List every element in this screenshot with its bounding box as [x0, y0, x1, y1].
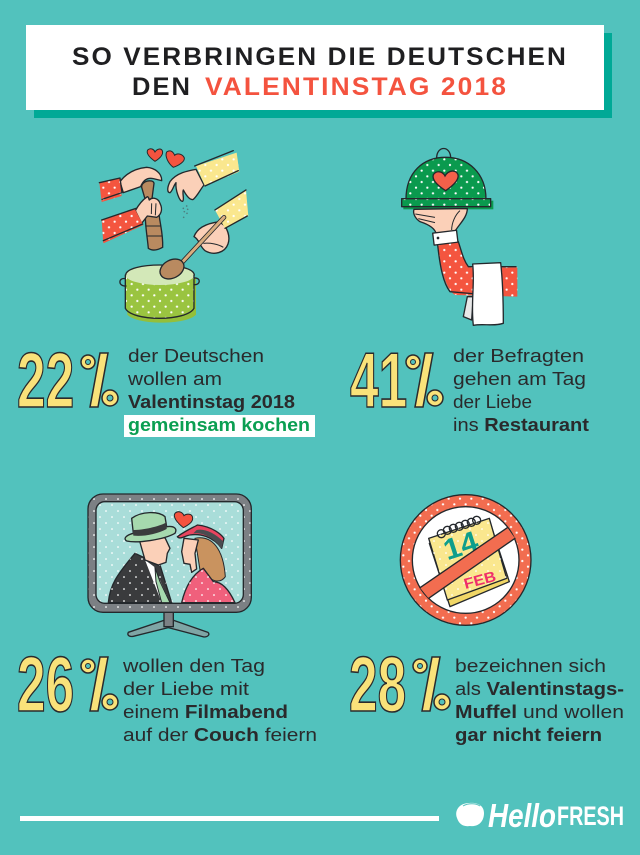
icon: hearts [147, 149, 184, 167]
stat text: einem Filmabend [123, 702, 288, 722]
stat text: bezeichnen sich [455, 656, 606, 676]
percentage: 22%: 22 [17, 337, 74, 425]
logo: HelloFRESH [456, 797, 624, 834]
stat text [122, 656, 317, 745]
icon: hand with yellow sleeve salting [168, 151, 239, 218]
icon: man with hat [108, 513, 176, 603]
stat text: wollen am [127, 369, 222, 389]
title text: VALENTINSTAG 2018 [205, 73, 508, 101]
icon: heart on TV [174, 512, 193, 528]
stat: 22 percent [17, 337, 315, 437]
percent sign [81, 353, 118, 407]
stat: 26 percent [17, 641, 317, 745]
icon: TV stand [128, 612, 209, 637]
title text: SO VERBRINGEN DIE DEUTSCHEN [72, 43, 568, 71]
icon: heart on cloche [433, 171, 458, 191]
stat: 41 percent [350, 337, 589, 435]
icon: prohibition bar [420, 528, 515, 598]
stat text: auf der Couch feiern [123, 725, 317, 745]
stat text: der Liebe mit [123, 679, 249, 699]
stat: 28 percent [349, 641, 624, 745]
stat text [453, 346, 589, 435]
illustration: waiter with cloche [402, 148, 517, 325]
icon: calendar [429, 516, 509, 607]
icon: woman with hat [177, 525, 235, 603]
stat text: gemeinsam kochen [128, 415, 310, 435]
percentage: 41% [350, 337, 443, 425]
percentage: 28%: 28 [349, 641, 406, 729]
percentage: 41%: 41 [350, 337, 407, 425]
footer line [20, 816, 439, 821]
icon: calendar: FEB [462, 569, 498, 593]
title text [72, 43, 568, 101]
stat text: Muffel und wollen [455, 702, 624, 722]
icon: wooden spoon [157, 217, 224, 283]
percentage: 28% [349, 641, 450, 729]
percent sign [81, 657, 118, 711]
stat text: gehen am Tag [453, 369, 586, 389]
stat text [124, 346, 315, 437]
icon: hand with red sleeve top [99, 167, 162, 202]
icon: red sleeve [433, 230, 517, 297]
title text: DEN [132, 73, 192, 101]
icon: cooking pot [120, 265, 199, 323]
stat text: der Befragten [453, 346, 584, 366]
stat text [455, 656, 624, 745]
stat text: der Liebe [453, 392, 532, 412]
icon: pepper mill [142, 181, 163, 250]
icon: hand with yellow sleeve stirring [194, 190, 248, 253]
percentage: 22% [17, 337, 118, 425]
icon: TV frame [88, 494, 251, 612]
icon: white towel [463, 263, 503, 325]
icon: prohibition ring background [400, 495, 531, 625]
icon: serving hand [414, 209, 467, 235]
icon: cloche [402, 148, 493, 209]
illustration: cooking together [99, 149, 248, 323]
stat text: ins Restaurant [453, 415, 589, 435]
percent sign [406, 353, 443, 407]
logo: HelloFRESH: Hello [488, 797, 556, 834]
title banner [26, 25, 612, 118]
percentage: 26%: 26 [17, 641, 74, 729]
stat text: gar nicht feiern [455, 725, 602, 745]
percent sign [413, 657, 450, 711]
percentage: 26% [17, 641, 118, 729]
stat text: der Deutschen [128, 346, 264, 366]
icon: hand with red sleeve bottom [102, 197, 162, 243]
stat text: als Valentinstags- [455, 679, 624, 699]
icon: lemon [456, 803, 484, 826]
stat text: Valentinstag 2018 [128, 392, 295, 412]
icon: calendar: 14 [439, 525, 483, 567]
illustration: crossed-out calendar [400, 495, 531, 625]
illustration: movie night on TV [88, 494, 251, 637]
stat text: wollen den Tag [122, 656, 265, 676]
